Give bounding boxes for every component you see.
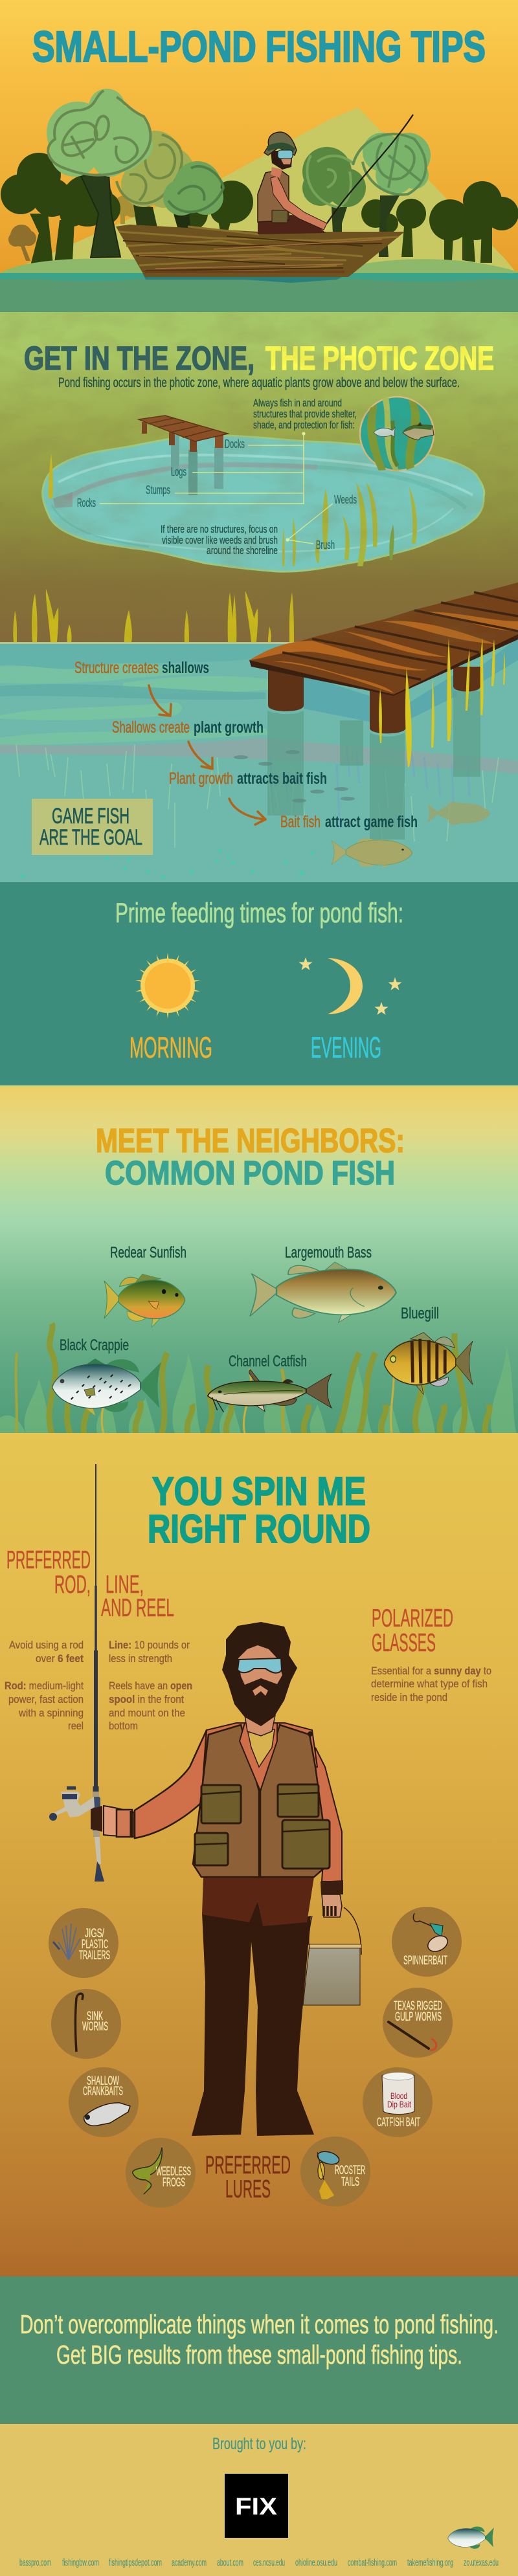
- callout: game fish: [32, 799, 153, 855]
- text: polarized glasses: [371, 1604, 491, 1704]
- lure: shallow crankbaits: SHALLOW: [87, 2074, 119, 2088]
- dock shadow: [304, 675, 370, 722]
- process text: attract game fish: [325, 813, 418, 831]
- text: rod advice: reel: [68, 1720, 84, 1732]
- upper trousers: [202, 1877, 314, 1926]
- text: line and reel advice: spool in the front: [109, 1693, 184, 1705]
- heading: [148, 1469, 370, 1551]
- callout: game fish: ARE THE GOAL: [39, 825, 142, 850]
- fisherman: [258, 132, 327, 234]
- label: channel catfish: Channel Catfish: [229, 1353, 307, 1370]
- panel: footer: [0, 2424, 518, 2576]
- panel: water cross-section: [0, 583, 518, 883]
- lure: spinnerbait: [392, 1907, 462, 1977]
- text: rod heading: LINE,: [106, 1571, 144, 1599]
- inset fish: [374, 422, 434, 440]
- icon: moon and stars: [299, 957, 401, 1015]
- text: rod advice: over 6 feet: [36, 1652, 84, 1665]
- ground hills: [0, 258, 518, 274]
- lure: sink worms: WORMS: [82, 2020, 108, 2034]
- callout: structures: structures that provide shelter,: [253, 408, 357, 420]
- t-shirt and collar: [240, 1723, 277, 1791]
- cover labels: Weeds: [334, 493, 357, 506]
- icon: sun: [135, 953, 201, 1019]
- pond dock: [139, 416, 228, 495]
- label: black crappie: Black Crappie: [60, 1337, 129, 1354]
- fishing rod: [93, 1464, 104, 1882]
- tree crown: light green: [47, 89, 153, 177]
- inset: fish among weeds: [360, 397, 434, 471]
- pond weeds: [0, 1324, 517, 1434]
- cover labels: [286, 493, 357, 551]
- process text: Plant growth: [169, 770, 233, 788]
- sources: ohioline.osu.edu: [295, 2557, 337, 2568]
- lure: shallow crankbaits: CRANKBAITS: [83, 2085, 123, 2098]
- text: line and reel advice: Line: 10 pounds or: [109, 1639, 190, 1651]
- panel: photic zone: [0, 312, 518, 644]
- lure: weedless frogs: FROGS: [163, 2176, 185, 2190]
- text: rod advice: power, fast action: [8, 1693, 84, 1705]
- text: rod advice: Rod: medium-light: [5, 1680, 84, 1692]
- text: polarized glasses: determine what type of fish: [371, 1678, 488, 1690]
- text: line and reel advice: [109, 1639, 192, 1732]
- underwater blue-violet weeds: [271, 744, 469, 828]
- sources: academy.com: [172, 2557, 207, 2568]
- label: preferred lures: LURES: [225, 2175, 271, 2203]
- lure: jigs: [49, 1908, 118, 1978]
- lure: rooster tails: [300, 2137, 370, 2206]
- lure: spinnerbait: SPINNERBAIT: [403, 1954, 447, 1968]
- mountain: [0, 107, 518, 275]
- fish: largemouth bass: [250, 1262, 396, 1322]
- fish: black crappie: [52, 1359, 161, 1416]
- sources: about.com: [217, 2557, 243, 2568]
- text: line and reel advice: bottom: [109, 1720, 138, 1732]
- panel: common pond fish: [0, 1087, 518, 1434]
- structure labels: [77, 432, 306, 509]
- text: rod advice: [5, 1639, 84, 1732]
- heading: MEET THE NEIGHBORS:: [96, 1122, 405, 1160]
- arrows: [149, 685, 265, 825]
- sources: ces.ncsu.edu: [253, 2557, 285, 2568]
- label: bluegill: Bluegill: [401, 1305, 439, 1322]
- sources: fishingtipsdepot.com: [109, 2557, 162, 2568]
- label: redear sunfish: Redear Sunfish: [110, 1244, 186, 1261]
- logo: fix: FIX: [235, 2493, 277, 2520]
- text: polarized glasses: Essential for a sunny day to: [371, 1665, 491, 1677]
- heading: COMMON POND FISH: [105, 1155, 395, 1192]
- callout: structures: Always fish in and around: [253, 397, 342, 409]
- lure: catfish bait: Dip Bait: [387, 2099, 411, 2109]
- label: evening: EVENING: [311, 1031, 381, 1064]
- pebbles: [21, 849, 313, 879]
- structure labels: Rocks: [77, 496, 96, 509]
- lure: jigs: TRAILERS: [79, 1949, 110, 1962]
- text: line and reel advice: and mount on the: [109, 1707, 185, 1719]
- callout: structures: shade, and protection for fish:: [253, 419, 355, 431]
- vest: [193, 1725, 330, 1877]
- lure: catfish bait: Blood: [390, 2091, 407, 2101]
- heading: [96, 1122, 405, 1192]
- lure: catfish bait: CATFISH BAIT: [377, 2116, 420, 2129]
- label: preferred lures: [205, 2151, 291, 2203]
- process text: attracts bait fish: [237, 770, 327, 788]
- tree crown: green: [163, 161, 223, 216]
- callout: structures: [253, 397, 357, 431]
- structure labels: Logs: [171, 465, 186, 478]
- callout: cover: around the shoreline: [207, 544, 278, 557]
- callout: cover: visible cover like weeds and brush: [162, 534, 278, 546]
- text: polarized glasses: reside in the pond: [371, 1691, 447, 1704]
- distant trees: [8, 195, 139, 261]
- sources: [19, 2557, 499, 2568]
- text: polarized glasses: GLASSES: [372, 1629, 436, 1657]
- callout: cover: If there are no structures, focus on: [161, 523, 278, 535]
- heading: Prime feeding times for pond fish:: [115, 898, 403, 929]
- cover labels: Brush: [316, 539, 335, 551]
- dock legs: [268, 667, 480, 733]
- text: rod heading: [6, 1546, 174, 1622]
- heading: RIGHT ROUND: [148, 1507, 370, 1551]
- lure: sink worms: SINK: [87, 2010, 103, 2023]
- text: rod heading: ROD,: [54, 1571, 91, 1599]
- pond: [43, 435, 484, 572]
- bucket: [303, 1907, 361, 2005]
- lure: weedless frogs: [126, 2138, 196, 2208]
- lure: texas rigged gulp worms: GULP WORMS: [395, 2010, 442, 2024]
- text: line and reel advice: Reels have an open: [109, 1680, 192, 1692]
- fish: redear sunfish: [104, 1274, 185, 1327]
- figure: angler: [91, 1622, 343, 2136]
- process text: Shallows create: [112, 718, 190, 737]
- dark trees left: [1, 153, 253, 265]
- heading: GET IN THE ZONE,: [24, 340, 254, 377]
- callout: cover: [161, 523, 278, 557]
- logo: fix: [225, 2474, 288, 2538]
- dock reeds: [379, 638, 505, 767]
- text: line and reel advice: less in strength: [109, 1652, 172, 1665]
- goggles: [238, 1658, 282, 1673]
- right arm: [314, 1748, 343, 1917]
- sources: takemefishing.org: [407, 2557, 453, 2568]
- process text: plant growth: [194, 718, 264, 737]
- structure labels: Stumps: [146, 483, 170, 496]
- text: rod advice: Avoid using a rod: [9, 1639, 84, 1651]
- water bands: [0, 644, 518, 773]
- panel: closing message: [0, 2276, 518, 2424]
- boat: [116, 225, 405, 277]
- heading: [24, 340, 494, 377]
- text: rod heading: AND REEL: [101, 1594, 174, 1622]
- sources: basspro.com: [19, 2557, 51, 2568]
- panel: gear: [0, 1433, 518, 2276]
- water: [0, 273, 518, 312]
- label: morning: MORNING: [130, 1031, 212, 1064]
- game fish: small: [427, 802, 490, 825]
- dock reflections: [267, 691, 480, 839]
- panel: hero scene: [0, 0, 518, 312]
- text: polarized glasses: POLARIZED: [372, 1604, 453, 1632]
- lure: texas rigged gulp worms: TEXAS RIGGED: [394, 1999, 442, 2013]
- lure: weedless frogs: WEEDLESS: [156, 2165, 191, 2179]
- lure: catfish bait: [363, 2067, 433, 2137]
- fish: channel catfish: [208, 1370, 332, 1412]
- underwater grass: [16, 744, 499, 848]
- lure: shallow crankbaits: [69, 2067, 139, 2137]
- lure: jigs: PLASTIC: [82, 1938, 108, 1951]
- process text: Structure creates: [74, 659, 159, 677]
- process text: shallows: [162, 659, 209, 677]
- sources: combat-fishing.com: [348, 2557, 397, 2568]
- process text: Bait fish: [280, 813, 321, 831]
- bait fish: [234, 750, 355, 803]
- label: largemouth bass: Largemouth Bass: [285, 1244, 372, 1261]
- icon: small fish: [448, 2526, 494, 2549]
- sources: fishingbw.com: [62, 2557, 99, 2568]
- lure: rooster tails: TAILS: [341, 2175, 359, 2189]
- large dock: [249, 583, 518, 733]
- lure: texas rigged gulp worms: [383, 1988, 453, 2058]
- text: rod advice: with a spinning: [18, 1707, 84, 1719]
- label: preferred lures: PREFERRED: [205, 2151, 291, 2179]
- shore reeds: [13, 589, 294, 644]
- game fish: large: [332, 838, 412, 869]
- fishing rod: [327, 115, 413, 223]
- fish: bluegill: [384, 1333, 473, 1394]
- left arm: [91, 1730, 207, 1838]
- panel: prime feeding times: [0, 882, 518, 1087]
- callout: game fish: GAME FISH: [52, 804, 130, 828]
- lure: jigs: JIGS/: [85, 1927, 104, 1940]
- head: [222, 1622, 297, 1726]
- lure: rooster tails: ROOSTER: [335, 2164, 365, 2177]
- credit line: Brought to you by:: [212, 2435, 306, 2453]
- tree crown: olive: [117, 131, 194, 208]
- main tree trunk: [81, 173, 120, 258]
- structure labels: Docks: [225, 438, 245, 450]
- legs: [192, 1901, 314, 2136]
- reel: [49, 1786, 95, 1821]
- text: rod heading: PREFERRED: [6, 1546, 91, 1574]
- right trees: [302, 133, 518, 263]
- lure: sink worms: [51, 1989, 121, 2059]
- heading: YOU SPIN ME: [152, 1469, 366, 1513]
- process text: [74, 659, 418, 831]
- pond reeds: [49, 453, 417, 566]
- shirt: [205, 1723, 317, 1767]
